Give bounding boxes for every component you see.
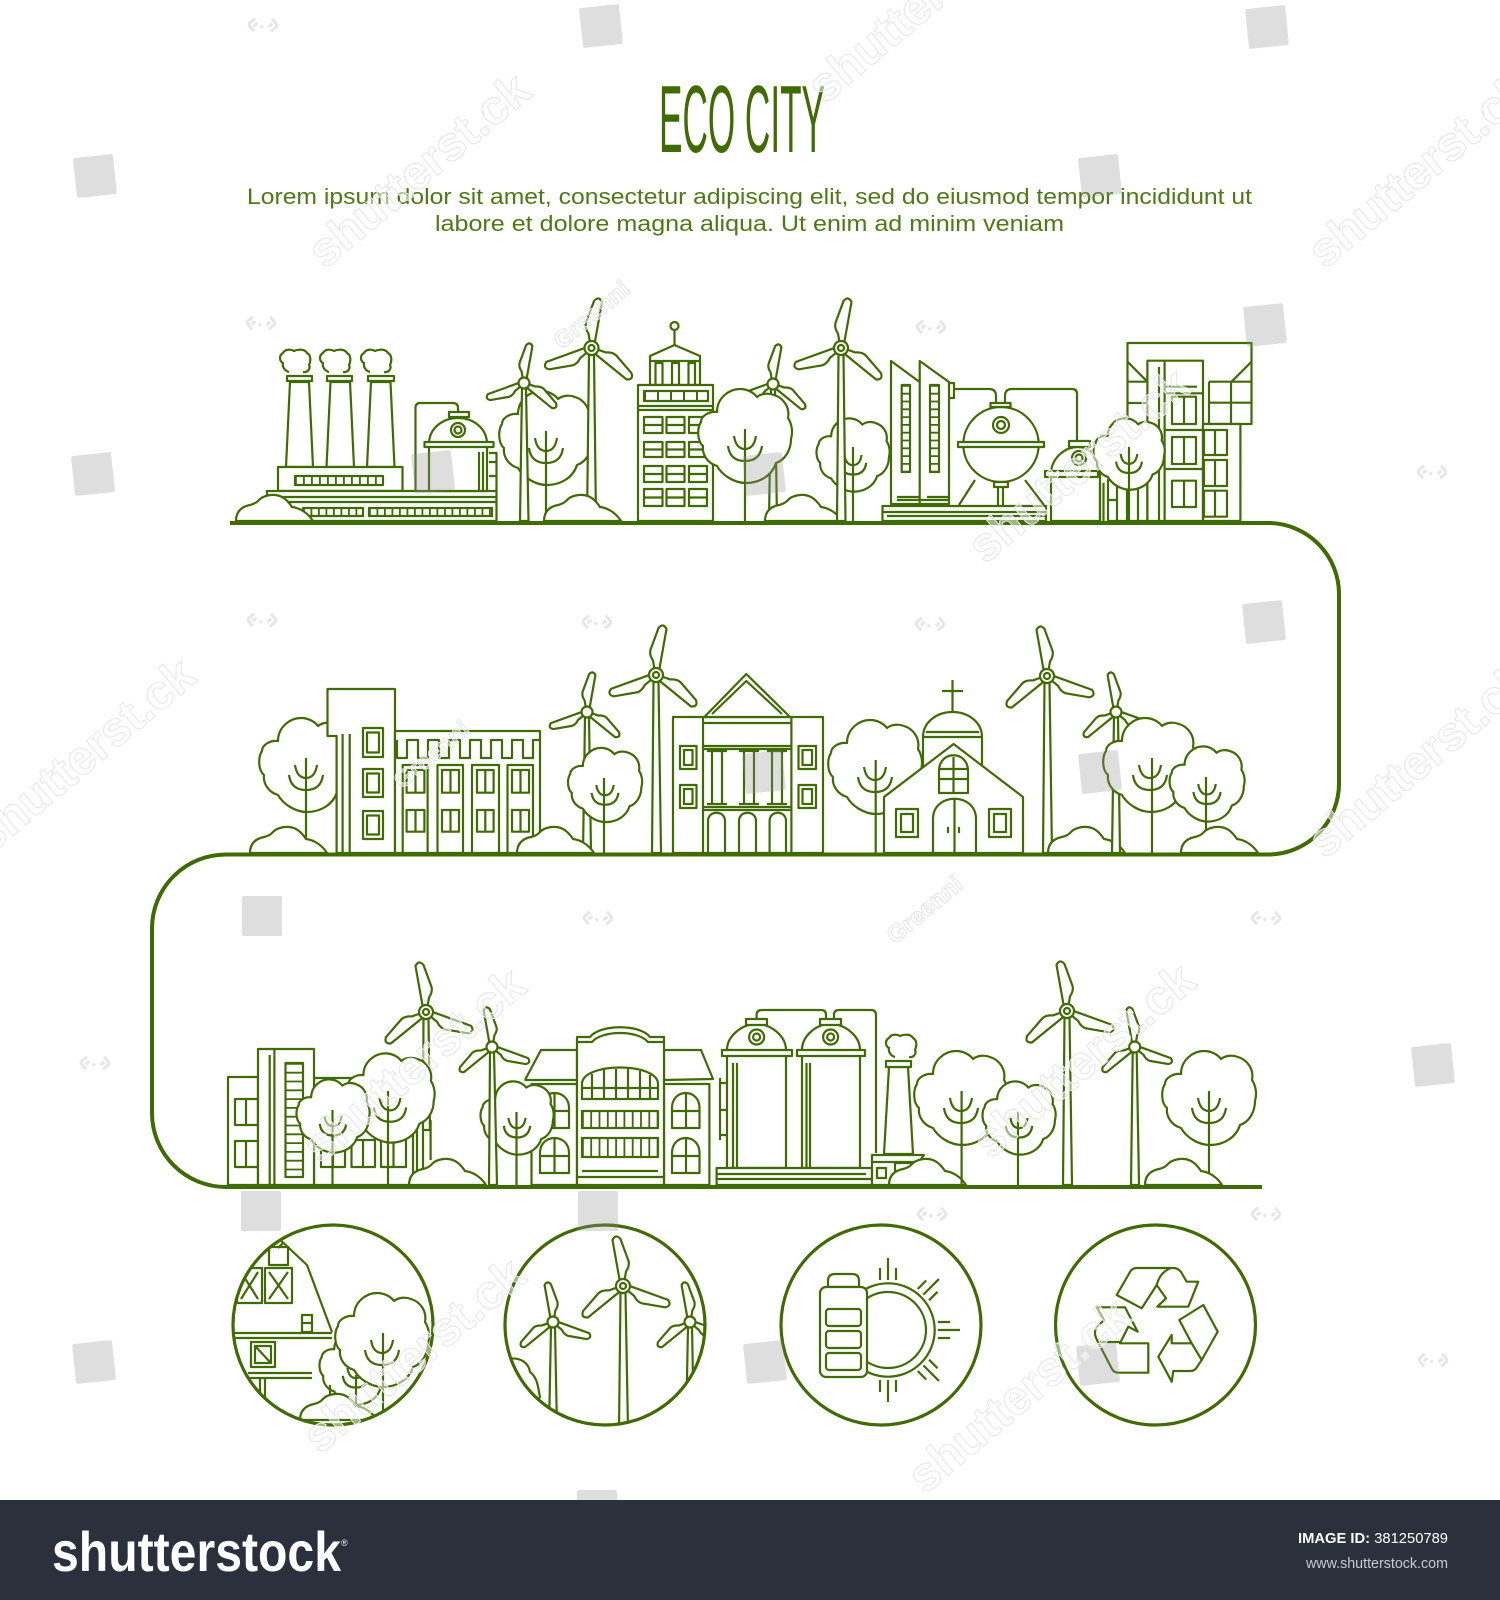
wind turbine large bbox=[544, 297, 637, 521]
wind turbine small bbox=[1098, 1006, 1173, 1185]
tree bbox=[259, 718, 353, 853]
watermark text: shutterst.ck bbox=[298, 63, 541, 278]
wind turbine small bbox=[456, 1006, 530, 1185]
battery bbox=[820, 1274, 867, 1377]
tree bbox=[914, 1051, 1008, 1185]
spherical tank with pipes bbox=[882, 389, 1077, 521]
storage tank with pipe bbox=[416, 403, 496, 491]
watermark contributor names: Greenni bbox=[389, 716, 475, 795]
classical town hall bbox=[673, 674, 823, 853]
tree bbox=[1170, 746, 1245, 840]
twin storage tanks with pipes bbox=[717, 1010, 876, 1185]
tree bbox=[346, 1053, 435, 1185]
bush bbox=[1048, 827, 1125, 853]
slanted high-rise bbox=[891, 361, 954, 504]
text: ECO CITY bbox=[659, 66, 825, 173]
wind turbine large bbox=[793, 297, 886, 521]
wind turbine large bbox=[381, 961, 474, 1130]
watermark text: shutterst.ck bbox=[293, 1248, 536, 1463]
bush bbox=[889, 1159, 966, 1185]
manor house bbox=[526, 1027, 713, 1185]
city row 3: mixed skyline bbox=[228, 960, 1256, 1185]
city row 2: civic skyline bbox=[250, 624, 1258, 853]
city row 1: industrial skyline bbox=[236, 297, 1252, 521]
registered mark: ® bbox=[341, 1538, 348, 1548]
wind turbine large bbox=[1002, 625, 1095, 853]
bush bbox=[1145, 1159, 1222, 1185]
school building with wing bbox=[328, 689, 540, 853]
subtitle text: Lorem ipsum dolor sit amet, consectetur adipiscing elit, sed do eiusmod tempor incididunt ut bbox=[247, 184, 1252, 209]
icon circle: wind turbines bbox=[505, 1225, 728, 1430]
footer bar bbox=[0, 1500, 1500, 1600]
tree bbox=[568, 748, 642, 853]
factory with chimneys bbox=[267, 350, 496, 521]
church with dome and cross bbox=[884, 680, 1023, 853]
watermark text: shutterst.ck bbox=[293, 958, 536, 1173]
watermark text: shutterst.ck bbox=[963, 953, 1206, 1168]
bush bbox=[544, 495, 621, 521]
tree bbox=[828, 720, 922, 853]
modern apartment block bbox=[1108, 343, 1252, 521]
tree bbox=[481, 1081, 554, 1185]
bush bbox=[1181, 827, 1258, 853]
wind turbine large bbox=[608, 624, 701, 853]
icon circle: farm barn and trees bbox=[230, 1225, 433, 1425]
tree bbox=[1103, 718, 1197, 853]
footer logo: shutterstock bbox=[52, 1520, 342, 1583]
subtitle text: labore et dolore magna aliqua. Ut enim ad minim veniam bbox=[435, 211, 1064, 236]
small dome tank bbox=[1045, 441, 1104, 521]
office tower bbox=[638, 322, 713, 521]
apartment block bbox=[228, 1049, 431, 1185]
bush bbox=[517, 827, 594, 853]
watermark contributor names bbox=[389, 276, 968, 950]
tree bbox=[499, 391, 593, 521]
bush bbox=[236, 495, 313, 521]
watermark contributor names: Greenni bbox=[882, 871, 968, 950]
website: www.shutterstock.com bbox=[1305, 1555, 1448, 1572]
bush bbox=[409, 1159, 486, 1185]
icon circle: solar battery bbox=[781, 1225, 981, 1425]
tree bbox=[983, 1081, 1056, 1185]
watermark text: shutterst.ck bbox=[958, 358, 1201, 573]
bush bbox=[765, 495, 842, 521]
tree bbox=[297, 1079, 370, 1185]
wind turbine small bbox=[486, 342, 560, 521]
image id: IMAGE ID: 381250789 bbox=[1298, 1530, 1448, 1547]
sun rays bbox=[880, 1258, 960, 1402]
tree bbox=[698, 389, 792, 521]
watermark text: shutterst.ck bbox=[898, 1288, 1141, 1503]
tree bbox=[1162, 1051, 1256, 1185]
wind turbine small bbox=[549, 671, 623, 853]
watermark link icons bbox=[80, 10, 1448, 1375]
wind turbine small bbox=[1080, 671, 1154, 853]
winding road line connecting rows bbox=[152, 523, 1339, 1187]
tree bbox=[817, 418, 890, 521]
wind turbine large bbox=[1022, 960, 1115, 1185]
single chimney with smoke bbox=[872, 1035, 924, 1185]
tree bbox=[1093, 418, 1165, 521]
icon circle: recycling arrows bbox=[1056, 1225, 1256, 1425]
wind turbine small bbox=[735, 343, 809, 521]
watermark contributor names: Greenni bbox=[549, 276, 635, 355]
subtitle text bbox=[247, 184, 1252, 236]
bush bbox=[250, 827, 327, 853]
